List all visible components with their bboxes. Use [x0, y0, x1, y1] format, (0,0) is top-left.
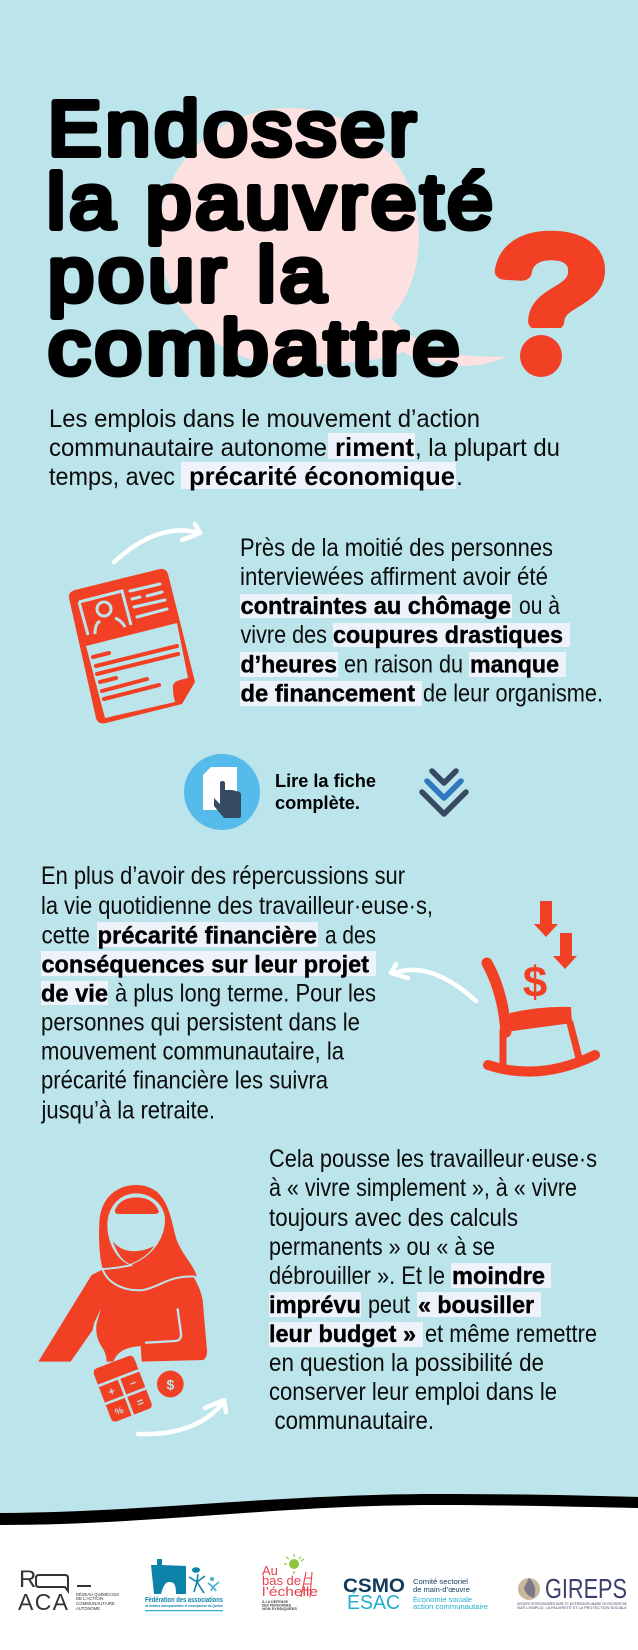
paragraph 2 [41, 862, 433, 1124]
paragraph 1 [240, 534, 603, 708]
link text: lire la fiche [275, 771, 376, 813]
logo: GIREPS: SUR L’EMPLOI, LA PAUVRETÉ ET LA PROTECTION SOCIALE [517, 1605, 627, 1610]
logo: CSMO ÉSAC: de main-d’œuvre [413, 1587, 470, 1594]
icon: triple down chevron [422, 771, 466, 814]
paragraph 3: conserver leur emploi dans le [269, 1378, 557, 1406]
paragraph 3: « bousiller [418, 1292, 534, 1319]
paragraph 1: coupures drastiques [333, 622, 563, 649]
logo: Fédération des associations [145, 1559, 224, 1611]
paragraph 3: peut [368, 1291, 410, 1319]
paragraph 2: précarité financière [98, 922, 317, 950]
paragraph 1: interviewées affirment avoir été [240, 563, 548, 591]
paragraph 3: Cela pousse les travailleur·euse·s [269, 1145, 597, 1173]
paragraph 2: la vie quotidienne des travailleur·euse·s, [41, 892, 433, 920]
icon: dollar coin [157, 1371, 184, 1397]
paragraph 2: à plus long terme. Pour les [115, 980, 376, 1008]
paragraph 3: leur budget » [269, 1321, 416, 1348]
paragraph 2: a des [325, 922, 376, 950]
paragraph 2: précarité financière les suivra [41, 1066, 328, 1094]
intro text: , la plupart du [415, 434, 560, 462]
logo: RQACA: COMMUNAUTAIRE [76, 1601, 115, 1606]
logo: RQACA: AUTONOME [76, 1606, 100, 1611]
logo: CSMO ÉSAC: Comité sectoriel [413, 1579, 468, 1586]
logo: Fédération des associations: Fédération des associations [145, 1597, 223, 1604]
title: pour la [48, 232, 330, 318]
logo: Au bas de l'échelle: Au [262, 1563, 278, 1578]
logo: Fédération des associations: de familles monoparentales et recomposées du Québec [145, 1603, 224, 1608]
paragraph 2: En plus d’avoir des répercussions sur [41, 862, 405, 890]
logo: CSMO ÉSAC: ÉSAC [347, 1591, 400, 1614]
speech bubble behind title [159, 108, 508, 366]
paragraph 1: de leur organisme. [423, 680, 603, 708]
paragraph 1: manque [470, 652, 559, 678]
paragraph 2: mouvement communautaire, la [41, 1038, 344, 1066]
icon: CV document [69, 569, 195, 723]
footer white area with black wavy band [0, 1494, 638, 1650]
title: Endosser [48, 86, 420, 172]
logo: CSMO ÉSAC: action communautaire [413, 1604, 488, 1611]
intro text: précarité économique [189, 461, 455, 491]
link text: lire la fiche: complète. [275, 793, 360, 813]
logo: CSMO ÉSAC: Économie sociale [413, 1595, 472, 1604]
arrow: curved white to second paragraph [391, 964, 476, 1001]
icon: calculator: + [107, 1385, 117, 1399]
paragraph 3: permanents » ou « à se [269, 1233, 495, 1261]
logo: CSMO ÉSAC: CSMO [343, 1576, 405, 1597]
icon: rocking chair with dollar and falling arrows: $ [523, 958, 547, 1007]
paragraph 2: jusqu’à la retraite. [41, 1096, 215, 1124]
paragraph 3: à « vivre simplement », à « vivre [269, 1174, 577, 1202]
paragraph 3: en question la possibilité de [269, 1349, 544, 1377]
logo: GIREPS [517, 1573, 627, 1610]
paragraph 2: conséquences sur leur projet [42, 952, 369, 978]
icon: calculator: = [135, 1396, 146, 1410]
logo: RQACA [18, 1566, 119, 1615]
intro text: Les emplois dans le mouvement d’action [49, 405, 480, 433]
icon: hand on document button [184, 754, 260, 830]
intro text: . [456, 463, 463, 491]
title: combattre [48, 305, 464, 391]
intro text: temps, avec [49, 463, 175, 491]
paragraph 3 [269, 1145, 597, 1435]
paragraph 1: ou à [519, 592, 560, 620]
paragraph 1: en raison du [344, 650, 463, 678]
paragraph 1: vivre des [240, 621, 327, 649]
title [47, 86, 497, 391]
icon: calculator: − [128, 1377, 139, 1391]
logo: RQACA: R [19, 1566, 36, 1593]
link text: lire la fiche: Lire la fiche [275, 771, 376, 791]
paragraph 2: cette [42, 922, 90, 950]
paragraph 1: contraintes au chômage [240, 593, 511, 620]
question mark: ? [497, 206, 602, 385]
paragraph 1: d’heures [240, 652, 337, 678]
logo: Au bas de l'échelle: bas de [262, 1573, 301, 1588]
icon: rocking chair with dollar and falling arrows [487, 901, 595, 1072]
paragraph 3: toujours avec des calculs [269, 1204, 518, 1232]
icon: dollar coin: $ [166, 1376, 174, 1392]
logo: Au bas de l'échelle: l’échelle [262, 1584, 318, 1599]
logo: RQACA: DE L’ACTION [76, 1596, 103, 1601]
intro text [49, 405, 560, 491]
intro text: riment [335, 432, 414, 462]
arrow: curved white to first paragraph [114, 524, 200, 562]
paragraph 3: imprévu [269, 1292, 361, 1319]
paragraph 3: communautaire. [274, 1407, 434, 1435]
logo: RQACA: RÉSEAU QUÉBÉCOIS [76, 1592, 119, 1597]
paragraph 2: personnes qui persistent dans le [41, 1008, 360, 1036]
logo: Au bas de l'échelle: DES PERSONNES [262, 1604, 292, 1608]
paragraph 3: moindre [452, 1263, 545, 1290]
logo: Au bas de l'échelle: NON SYNDIQUÉES [262, 1606, 298, 1611]
paragraph 1: de financement [240, 680, 415, 708]
title: la pauvreté [47, 159, 497, 245]
intro text: communautaire autonome [49, 434, 327, 462]
icon: calculator [92, 1354, 153, 1423]
arrow: curved white to third paragraph [138, 1400, 226, 1434]
paragraph 3: débrouiller ». Et le [269, 1262, 445, 1290]
logo: Au bas de l'échelle: À LA DÉFENSE [262, 1599, 289, 1604]
logo: RQACA: ACA [18, 1589, 69, 1615]
icon: woman in hijab with calculator [38, 1185, 207, 1423]
paragraph 2: de vie [41, 980, 108, 1008]
question mark [494, 230, 605, 377]
logo: Au bas de l'échelle [262, 1554, 318, 1611]
paragraph 3: et même remettre [425, 1320, 597, 1348]
icon: calculator: % [113, 1405, 125, 1417]
paragraph 1: Près de la moitié des personnes [240, 534, 553, 562]
logo: CSMO ÉSAC [343, 1576, 488, 1614]
